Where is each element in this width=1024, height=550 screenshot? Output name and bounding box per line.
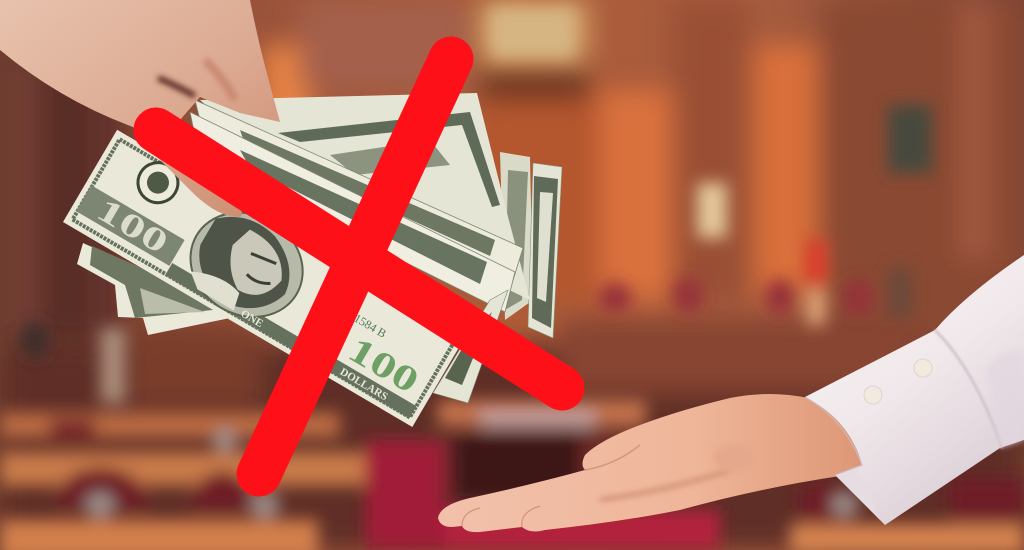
- text: dollars: DOLLARS: [338, 366, 390, 403]
- numeral: 100 corner: 100: [90, 192, 174, 261]
- red X mark: [156, 59, 562, 474]
- bills: stacked fan layers: [190, 100, 523, 403]
- hand holding the money: [0, 0, 280, 217]
- bill: front with portrait: [63, 130, 466, 427]
- cuff buttons: [864, 386, 882, 404]
- bill: back right edge: [500, 152, 562, 338]
- money: fan of hundred dollar bills: [63, 93, 562, 427]
- serial number: 1584 B: [352, 311, 389, 341]
- portrait oval: [171, 192, 322, 337]
- palm: [438, 394, 862, 532]
- text: one: ONE: [239, 308, 265, 330]
- open palm with shirt sleeve: [438, 255, 1024, 532]
- shirt sleeve: [805, 255, 1024, 525]
- bill: top: [200, 93, 530, 300]
- corner band left: [76, 185, 185, 266]
- bills: lower left edges: [77, 243, 250, 335]
- seal: [131, 155, 185, 210]
- bottom engraved band: [165, 263, 416, 418]
- numeral: 100 green: 100: [342, 329, 426, 401]
